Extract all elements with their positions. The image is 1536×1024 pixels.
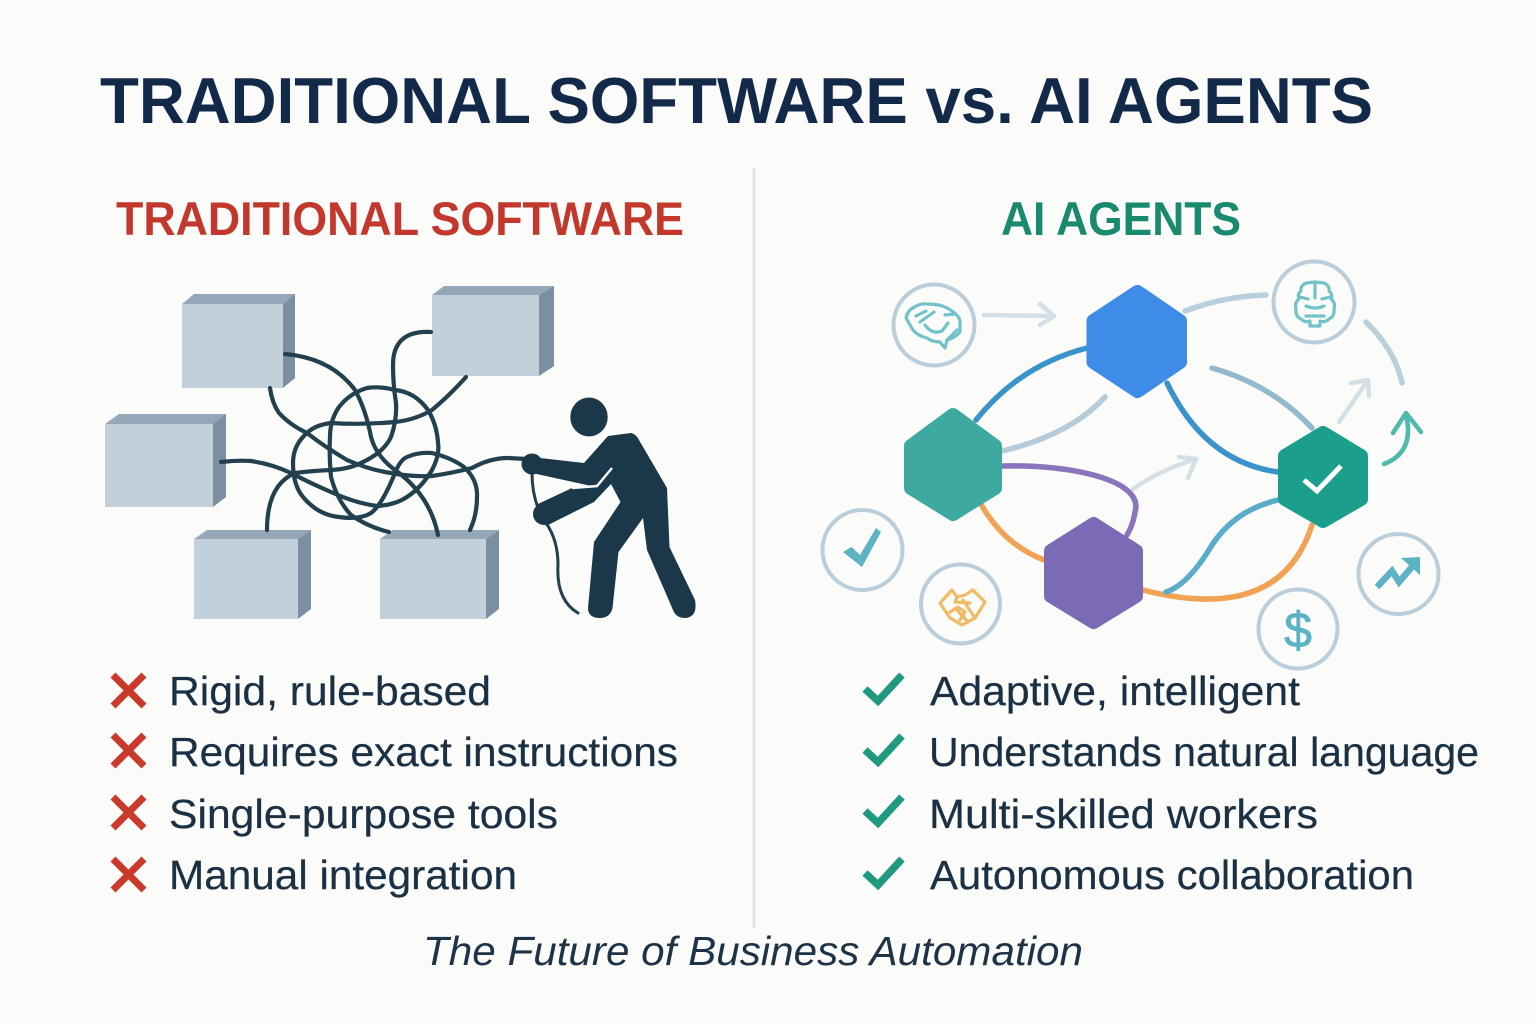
node: blue hexagon [1094, 292, 1180, 391]
arrows [984, 304, 1369, 489]
panel: AI agents [822, 192, 1479, 898]
item: manual integration: Manual integration [169, 852, 517, 898]
box: middle left [105, 414, 226, 507]
icon: dollar: $ [1284, 602, 1312, 658]
item: rigid: Rigid, rule-based [169, 668, 491, 714]
heading: traditional software: TRADITIONAL SOFTWARE [116, 192, 684, 245]
item: natural language: Understands natural language [929, 729, 1479, 775]
heading: AI agents: AI AGENTS [1001, 192, 1241, 245]
icon: checkmark [822, 510, 902, 590]
icon: brain top view [1274, 262, 1354, 342]
title: TRADITIONAL SOFTWARE vs. AI AGENTS [100, 64, 1373, 137]
box: bottom left [194, 530, 311, 619]
box: bottom right [380, 530, 499, 619]
icon: person pulling wires [522, 398, 696, 618]
diagram: agent network [822, 262, 1438, 668]
panel: traditional software [105, 192, 696, 898]
tangled wires [221, 332, 578, 613]
list: traditional software drawbacks [113, 668, 678, 898]
box: top left [182, 294, 295, 388]
illustration: boxes tangled by wires [105, 286, 696, 619]
item: multi-skilled: Multi-skilled workers [929, 791, 1318, 837]
footer tagline: The Future of Business Automation [423, 928, 1083, 974]
box: top right [432, 286, 554, 376]
item: single-purpose: Single-purpose tools [169, 791, 558, 837]
icon: dollar [1258, 590, 1338, 668]
icon: handshake [921, 564, 1000, 644]
node: purple hexagon [1051, 524, 1136, 622]
arrow: teal up [1384, 413, 1421, 464]
icon: brain side view [894, 284, 974, 366]
item: exact instructions: Requires exact instructions [169, 729, 678, 775]
list: AI agent benefits [865, 668, 1479, 898]
item: autonomous: Autonomous collaboration [930, 852, 1414, 898]
node: green hexagon with check [1285, 433, 1361, 521]
connectors [976, 295, 1402, 599]
icon: rising trend [1358, 534, 1438, 614]
node: teal hexagon [911, 415, 995, 514]
item: adaptive: Adaptive, intelligent [930, 668, 1301, 714]
